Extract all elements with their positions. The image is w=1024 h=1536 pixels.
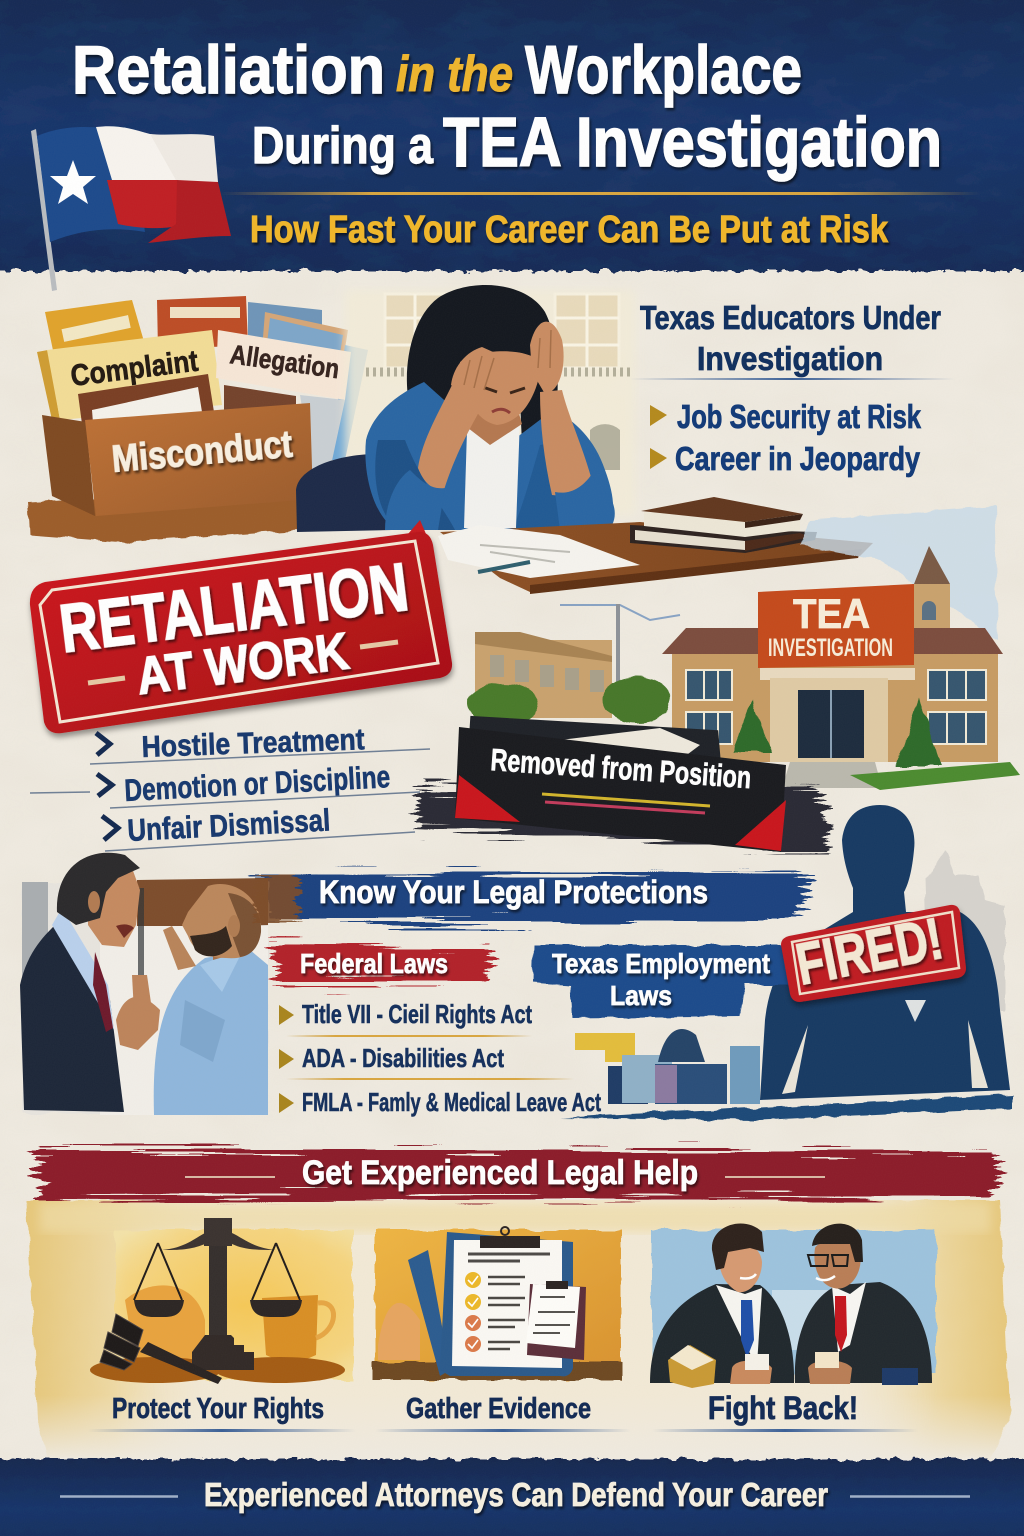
heading: Texas Educators Under Investigation: [630, 299, 955, 380]
subtitle: How Fast Your Career Can Be Put at Risk: [250, 209, 889, 251]
chair: [296, 454, 392, 532]
item: demotion or discipline: [30, 759, 420, 808]
books: [630, 497, 817, 553]
title: in the: [396, 46, 513, 102]
gavel: [100, 1314, 222, 1384]
title: During a: [252, 117, 434, 175]
icon: scales and gavel: [90, 1218, 353, 1384]
label: Gather Evidence: Gather Evidence: [406, 1393, 591, 1425]
heading: Texas Educators Under Investigation: Investigation: [697, 340, 883, 377]
illustration: city skyline: [575, 1029, 760, 1104]
sign: TEA Investigation: TEA: [793, 590, 870, 637]
folder: Allegation: Allegation: [228, 339, 341, 384]
label: Texas Employment Laws: Texas Employment: [552, 948, 770, 979]
brown brush start of legal protections: [255, 876, 300, 925]
label: Federal Laws: Federal Laws: [300, 948, 448, 979]
title: TEA Investigation: [443, 103, 942, 181]
item: unfair dismissal: Unfair Dismissal: [127, 802, 331, 848]
banner: removed from position: Removed from Position: [490, 742, 752, 795]
right man: [154, 884, 268, 1115]
header band: [0, 0, 1024, 271]
sign: Retaliation at Work: [30, 520, 452, 733]
label: Protect Your Rights: [88, 1393, 356, 1432]
list: career risks: [650, 398, 921, 477]
blazer: [365, 382, 613, 530]
illustration: TEA school building: [662, 546, 1020, 790]
title: Workplace: [525, 32, 802, 108]
illustration: file box: Misconduct: [110, 423, 294, 481]
folder: Complaint: [37, 330, 222, 420]
shirt: [464, 418, 520, 528]
icon: Texas flag: [31, 126, 231, 291]
light blue wash behind school: [800, 506, 998, 640]
illustration: two men arguing: [20, 853, 268, 1115]
banner: Know Your Legal Protections: [255, 872, 815, 922]
left attorney: [650, 1224, 794, 1384]
item: FMLA: FMLA - Famly & Medical Leave Act: [302, 1087, 601, 1117]
sign: Retaliation at Work: RETALIATION: [56, 549, 412, 667]
illustration: silhouette background skyline: [925, 850, 1005, 1010]
title: [72, 32, 942, 181]
papers: [438, 525, 640, 578]
neck, face: [468, 400, 522, 445]
item: demotion or discipline: Demotion or Discipline: [124, 759, 391, 808]
item: ADA: ADA - Disabilities Act: [302, 1043, 504, 1073]
panel: legal help backdrop: [20, 1200, 1020, 1461]
panel: bottom silhouette strip: [560, 1095, 1012, 1120]
footer band: [0, 1459, 1024, 1536]
box front: [85, 403, 313, 516]
item: Title VII: [279, 999, 532, 1029]
gold divider: [220, 192, 980, 195]
item: career in jeopardy: Career in Jeopardy: [675, 440, 921, 477]
folder: Complaint: Complaint: [69, 345, 200, 393]
illustration: silhouette of fired employee: [760, 805, 1010, 1100]
label: Fight Back!: [652, 1390, 918, 1432]
item: hostile treatment: Hostile Treatment: [141, 723, 365, 764]
box side: [42, 415, 95, 516]
label: Fight Back!: Fight Back!: [708, 1390, 858, 1426]
illustration: two attorneys: [650, 1224, 936, 1388]
banner: Know Your Legal Protections: Know Your Legal Protections: [319, 874, 708, 910]
list: federal laws: [279, 999, 601, 1117]
item: Title VII: Title VII - Cieil Rights Act: [302, 999, 532, 1029]
right attorney: [795, 1224, 932, 1384]
footer text: Experienced Attorneys Can Defend Your Career: [204, 1476, 828, 1513]
label: Federal Laws: [272, 944, 495, 984]
sign: Retaliation at Work: AT WORK: [133, 622, 352, 706]
sign: TEA Investigation: [758, 584, 914, 668]
title: Retaliation: [72, 32, 385, 108]
icon: clipboard checklist: [372, 1227, 622, 1380]
illustration: file box: [28, 296, 368, 542]
sign: TEA Investigation: INVESTIGATION: [768, 634, 893, 662]
label: Texas Employment Laws: Laws: [610, 980, 672, 1011]
item: FMLA: [279, 1087, 601, 1117]
banner: Get Experienced Legal Help: [35, 1150, 1003, 1200]
item: job security: Job Security at Risk: [677, 398, 921, 435]
label: Protect Your Rights: Protect Your Rights: [112, 1393, 324, 1425]
banner: Get Experienced Legal Help: Get Experienced Legal Help: [302, 1154, 698, 1192]
illustration: left school wing and trees: [468, 604, 680, 725]
back folders: [45, 296, 368, 460]
illustration: stressed woman at desk: [296, 285, 615, 532]
list: forms of retaliation: [30, 723, 430, 851]
scale: [134, 1218, 302, 1370]
hair: [407, 285, 558, 450]
label: Texas Employment Laws: [532, 945, 790, 1018]
banner: removed from position: [416, 716, 830, 852]
desk with books and papers: [438, 497, 873, 594]
mug: [262, 1295, 318, 1362]
forearms and hands: [418, 385, 484, 490]
illustration: building backdrop behind woman: [345, 290, 635, 515]
folder: Allegation: [216, 330, 351, 400]
stamp: FIRED: FIRED!: [791, 906, 948, 998]
left man: [20, 853, 160, 1112]
heading: Texas Educators Under Investigation: Texas Educators Under: [640, 299, 941, 336]
